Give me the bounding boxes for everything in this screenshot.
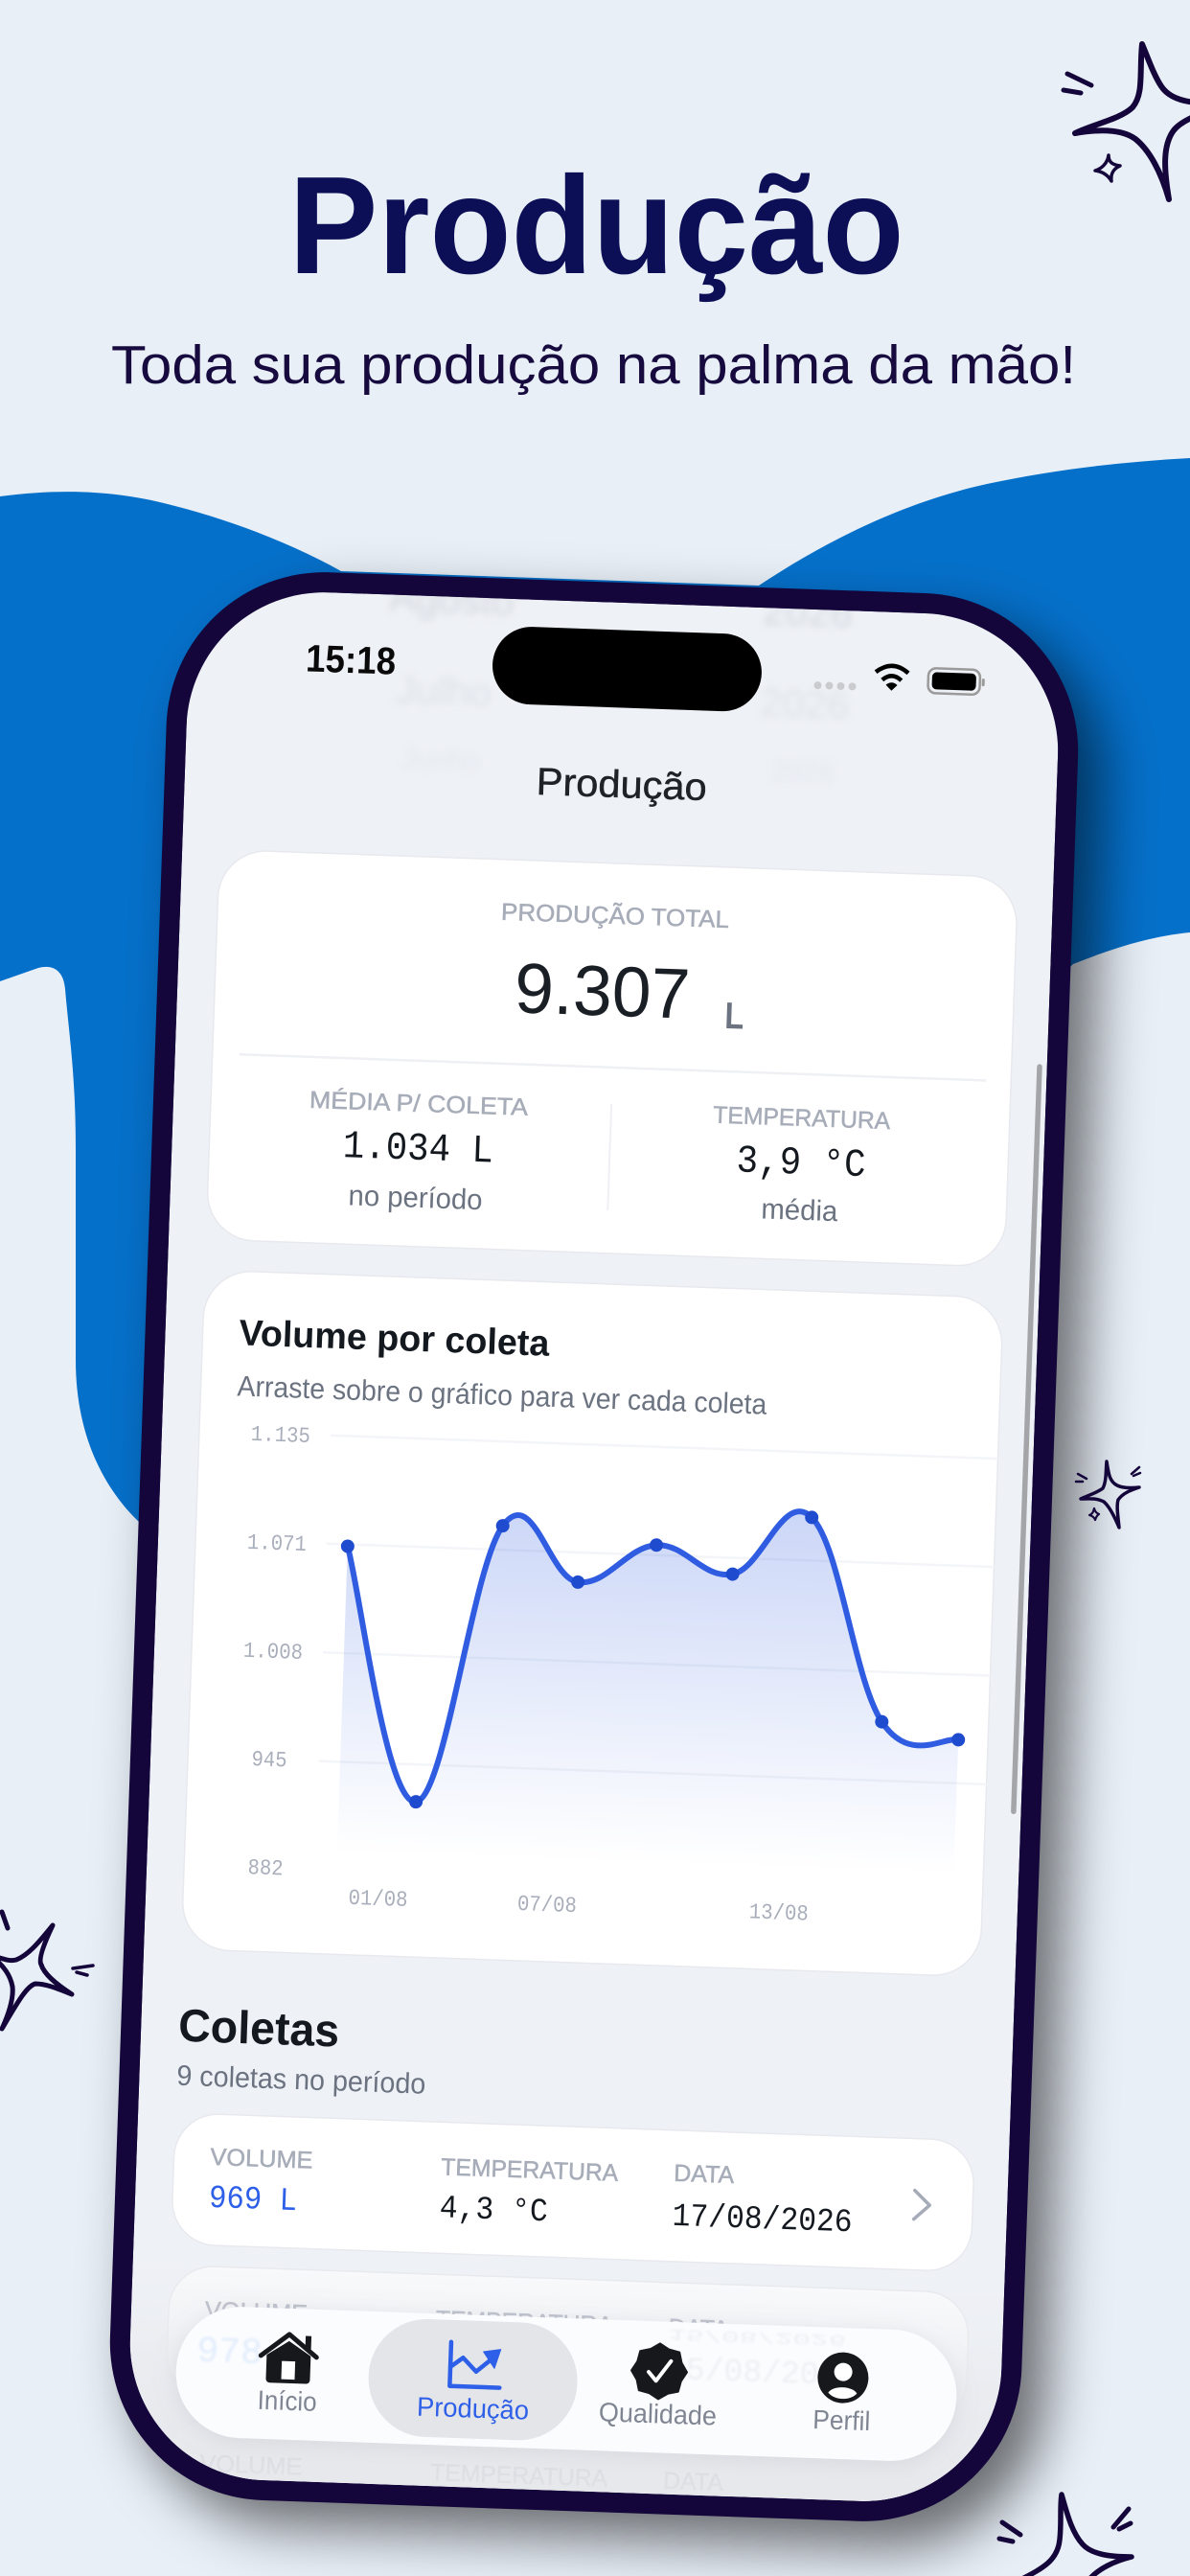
phone shadow [129, 594, 1109, 2553]
tab: inicio [257, 2334, 319, 2417]
metric: average: no período [348, 1180, 483, 1216]
value: total: 9.307 [514, 948, 692, 1034]
refracted content ghost: 15/08/2026 [666, 2353, 858, 2395]
tab: qualidade [598, 2341, 719, 2431]
icon: chevron [914, 2191, 930, 2220]
icon: profile [816, 2352, 869, 2404]
status time: 15:18 [305, 637, 397, 683]
list item 1: VOLUME [210, 2144, 313, 2174]
signal dots [813, 681, 857, 690]
tab: inicio: Início [257, 2385, 317, 2417]
metric: average: MÉDIA P/ COLETA [309, 1086, 529, 1121]
y axis labels: 1.071 [246, 1530, 307, 1557]
screen title: Produção [536, 761, 707, 809]
icon: wifi [875, 665, 908, 691]
list item 2 [176, 2267, 962, 2324]
phone mockup [103, 567, 1084, 2576]
list item 3: VOLUME [199, 2450, 303, 2480]
icon: sparkle bottom right [999, 2495, 1132, 2576]
y axis labels: 1.135 [250, 1422, 310, 1449]
tab: qualidade: Qualidade [598, 2397, 717, 2431]
metric: temperature: TEMPERATURA [713, 1102, 891, 1135]
blurred months behind header: Junho [401, 743, 481, 777]
screen [123, 567, 1064, 2576]
tab: producao [417, 2341, 531, 2426]
icon: battery [927, 668, 985, 695]
tab bar [173, 2305, 959, 2467]
blurred months behind header [391, 595, 851, 627]
chart hint: Arraste sobre o gráfico para ver cada coleta [237, 1370, 767, 1421]
x axis labels: 13/08 [748, 1899, 809, 1927]
list item 2: TEMPERATURA [435, 2306, 613, 2339]
blurred months behind header: Agosto [388, 574, 515, 624]
list item 3: TEMPERATURA [430, 2459, 608, 2493]
label: total: PRODUÇÃO TOTAL [501, 898, 730, 933]
y axis labels: 945 [251, 1747, 287, 1773]
icon: sparkle top right [1064, 44, 1190, 199]
dynamic island [492, 626, 763, 713]
screen background [126, 587, 1063, 2506]
line series [346, 1508, 952, 1804]
section heading: coletas: Coletas [177, 2001, 340, 2058]
blue blob behind phone [0, 458, 1190, 1523]
list item 1: TEMPERATURA [441, 2153, 619, 2187]
list item 3: DATA [663, 2468, 724, 2496]
phone frame [104, 567, 1084, 2526]
refracted content ghost: 978 [196, 2332, 263, 2375]
data points [341, 1510, 966, 1809]
refracted content ghost [196, 2308, 858, 2396]
refracted content ghost: 15/08/2026 [668, 2324, 847, 2349]
blurred months behind header: Julho [395, 667, 492, 715]
subtitle: Toda sua produção na palma da mão! [111, 334, 1076, 396]
metric: temperature: média [761, 1193, 838, 1228]
unit: L [724, 996, 744, 1038]
panel: volume chart [181, 1270, 1003, 1977]
title: Produção [289, 148, 904, 303]
list item 3 [160, 2419, 964, 2576]
list item 1 [171, 2113, 975, 2272]
blurred months behind header: 2026 [759, 679, 850, 727]
x axis labels: 01/08 [348, 1886, 408, 1913]
metric: average [306, 1086, 529, 1218]
blurred months behind header: 2026 [769, 755, 835, 790]
blurred months behind header: 2026 [763, 587, 854, 635]
icon: chart [449, 2342, 501, 2388]
tab: perfil: Perfil [812, 2404, 871, 2436]
list item 1: 969 L [208, 2181, 298, 2220]
icon: sparkle left [0, 1912, 93, 2029]
metric: temperature [713, 1106, 891, 1221]
y axis labels: 1.008 [243, 1639, 303, 1666]
icon: sparkle right [1076, 1461, 1140, 1528]
list item 1: DATA [674, 2160, 735, 2189]
x axis labels: 07/08 [516, 1892, 577, 1919]
x axis labels [349, 1889, 807, 1920]
icon: home [260, 2334, 317, 2384]
scrollbar [1011, 1064, 1042, 1814]
section subtitle: 9 coletas no período [176, 2060, 426, 2101]
metric: average: 1.034 L [342, 1125, 494, 1175]
active tab pill [367, 2317, 580, 2442]
y axis labels [244, 1426, 309, 1874]
panel: total production [206, 849, 1018, 1267]
chart heading: Volume por coleta [239, 1313, 551, 1365]
list item 2: DATA [668, 2314, 729, 2343]
tab: perfil [812, 2352, 873, 2436]
list item 2: VOLUME [204, 2297, 308, 2328]
tab: producao: Produção [417, 2392, 530, 2426]
list item 1: 4,3 °C [439, 2191, 548, 2231]
y axis labels: 882 [247, 1855, 284, 1881]
area under line [339, 1514, 958, 1819]
icon: badge [630, 2342, 688, 2400]
metric: temperature: 3,9 °C [736, 1139, 866, 1188]
list item 1: 17/08/2026 [672, 2199, 853, 2242]
